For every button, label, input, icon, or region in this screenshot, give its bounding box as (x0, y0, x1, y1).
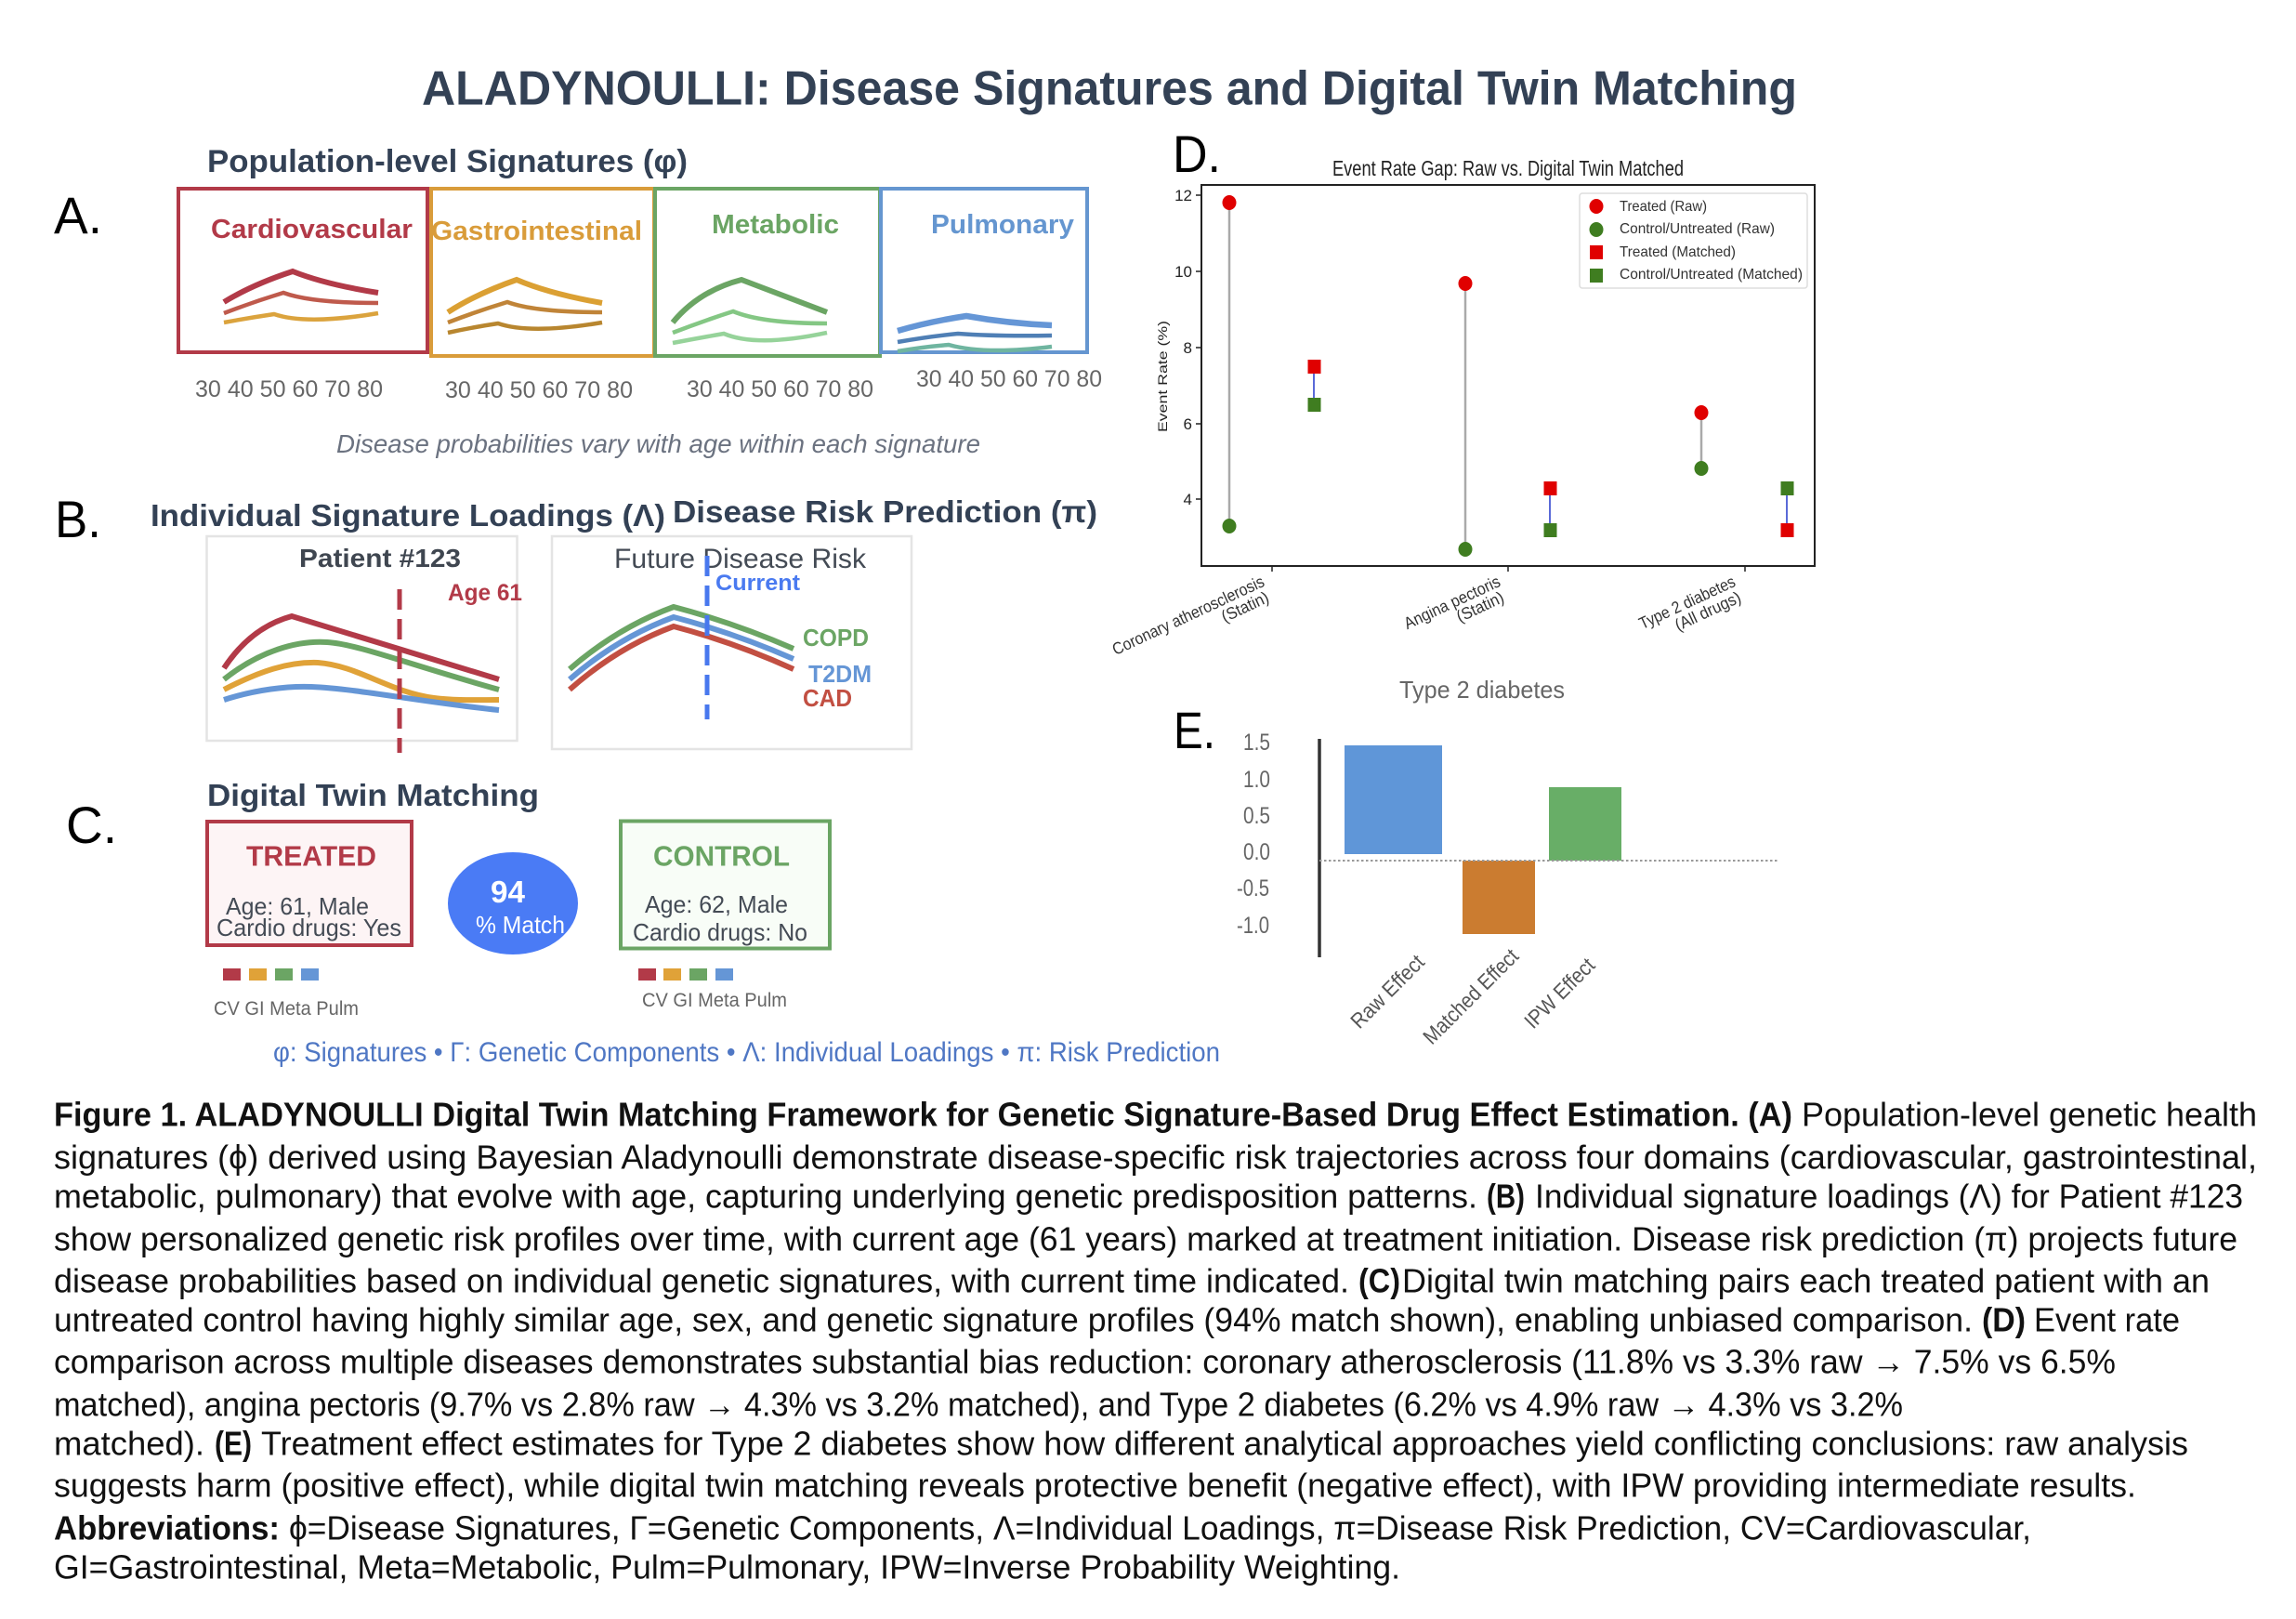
chart: patient loadings (206, 536, 522, 753)
heading: population-level signatures: Population-level Signatures (φ) (207, 144, 688, 179)
caption line 12: GI=Gastrointestinal, Meta=Metabolic, Pulm=Pulmonary, IPW=Inverse Probability Weighting. (54, 1548, 1400, 1586)
legend (1580, 193, 1807, 288)
y axis: 6 (1184, 415, 1192, 433)
card: gastrointestinal: 30 40 50 60 70 80 (445, 377, 633, 403)
caption line 5 (54, 1262, 2210, 1299)
card: cardiovascular: Cardiovascular (211, 215, 413, 244)
swatches: control signature profile: CV GI Meta Pulm (642, 990, 787, 1011)
chart: patient loadings: Patient #123 (299, 544, 461, 573)
caption line 6: Event rate (2034, 1301, 2180, 1338)
x axis labels: Angina pectoris (1401, 572, 1503, 633)
title: ALADYNOULLI: Disease Signatures and Digital Twin Matching (422, 61, 1797, 115)
caption line 3: Individual signature loadings (Λ) for Patient #123 (1535, 1177, 2243, 1216)
y axis: 4 (1184, 491, 1192, 508)
card: treated: Cardio drugs: Yes (216, 914, 401, 941)
caption line 4: show personalized genetic risk profiles over time, with current age (61 years) marked at treatment initiation. Disease risk prediction (π) projects future (54, 1219, 2237, 1258)
panel letter B: B. (55, 490, 101, 548)
card: gastrointestinal: Gastrointestinal (431, 217, 642, 246)
chart: future disease risk: CAD (803, 684, 852, 712)
caption line 5: (C) (1358, 1262, 1400, 1299)
heading: digital twin matching: Digital Twin Matching (207, 778, 539, 812)
card: metabolic: 30 40 50 60 70 80 (687, 376, 873, 402)
y axis: -1.0 (1237, 913, 1269, 939)
y axis: 1.5 (1243, 730, 1270, 756)
y axis: 1.0 (1243, 767, 1270, 793)
note: disease probabilities: Disease probabilities vary with age within each signature (336, 429, 980, 458)
bar labels: IPW Effect (1519, 953, 1600, 1033)
caption line 1: Population-level genetic health (1802, 1095, 2257, 1134)
caption line 2: signatures (ϕ) derived using Bayesian Aladynoulli demonstrate disease-specific risk trajectories across four domains (cardiovascular, gastrointestinal, (54, 1138, 2257, 1177)
card: control: CONTROL (653, 840, 790, 872)
figure caption (54, 1095, 2257, 1586)
card: treated: TREATED (246, 840, 376, 872)
card: metabolic: Metabolic (712, 210, 839, 240)
card: pulmonary (881, 189, 1102, 392)
type 2 diabetes points (1695, 405, 1793, 537)
caption line 6: untreated control having highly similar age, sex, and genetic signature profiles (94% match shown), enabling unbiased comparison. (54, 1301, 1973, 1338)
swatches: control signature profile (638, 968, 787, 1011)
panel B: loadings and risk prediction (55, 490, 1097, 753)
chart: patient loadings: Age 61 (448, 580, 522, 606)
symbol legend: φ: Signatures • Γ: Genetic Components • Λ: Individual Loadings • π: Risk Prediction (273, 1037, 1220, 1068)
chart: future disease risk: T2DM (808, 660, 872, 688)
card: treated: Age: 61, Male (226, 892, 369, 920)
y axis: Event Rate (%) (1155, 321, 1170, 432)
card: control: Cardio drugs: No (633, 918, 807, 946)
caption line 10: suggests harm (positive effect), while digital twin matching reveals protective benefit (negative effect), with IPW providing intermediate results. (54, 1467, 2136, 1504)
plot frame (1201, 185, 1815, 566)
y axis (1155, 187, 1201, 508)
legend: Treated (Matched) (1620, 244, 1736, 260)
legend: Control/Untreated (Raw) (1620, 221, 1775, 237)
x axis labels: (Statin) (1453, 587, 1507, 625)
panel A: population-level signatures (54, 144, 1102, 458)
panel letter C: C. (66, 796, 117, 854)
bar: matched effect (1463, 861, 1535, 934)
y axis: 0.0 (1243, 839, 1270, 865)
card: pulmonary: 30 40 50 60 70 80 (916, 366, 1102, 392)
zero line (1319, 860, 1779, 862)
badge: 94% match (448, 852, 578, 954)
caption line 9: matched). (54, 1424, 204, 1463)
badge: 94% match: 94 (491, 875, 526, 909)
x axis labels (1109, 566, 1745, 659)
caption line 3: (B) (1487, 1177, 1525, 1216)
bar: raw effect (1345, 745, 1442, 854)
heading: individual signature loadings: Individual Signature Loadings (Λ) (151, 498, 665, 533)
card: cardiovascular: 30 40 50 60 70 80 (195, 376, 383, 402)
legend: Treated (Raw) (1620, 199, 1707, 215)
caption line 8: matched), angina pectoris (9.7% vs 2.8% raw → 4.3% vs 3.2% matched), and Type 2 diabetes (6.2% vs 4.9% raw → 4.3% vs 3.2% (54, 1385, 1903, 1424)
y axis: 10 (1174, 263, 1192, 281)
caption line 5: disease probabilities based on individual genetic signatures, with current time indicated. (54, 1262, 1349, 1299)
card: cardiovascular (178, 189, 427, 402)
legend: Control/Untreated (Matched) (1620, 267, 1803, 283)
bar: IPW effect (1549, 787, 1621, 861)
caption line 1: Figure 1. ALADYNOULLI Digital Twin Matching Framework for Genetic Signature-Based Drug Effect Estimation. (A) (54, 1095, 1792, 1134)
swatches: treated signature profile: CV GI Meta Pulm (214, 998, 359, 1020)
card: control: Age: 62, Male (645, 890, 788, 918)
angina pectoris points (1459, 276, 1557, 557)
card: gastrointestinal (431, 189, 654, 403)
caption line 3 (54, 1177, 2243, 1216)
y axis (1237, 730, 1319, 957)
bar labels: Raw Effect (1345, 949, 1429, 1033)
caption line 5: Digital twin matching pairs each treated patient with an (1402, 1262, 2210, 1299)
panel letter A: A. (54, 186, 102, 244)
y axis: 8 (1184, 339, 1192, 357)
card: metabolic (655, 189, 880, 402)
coronary atherosclerosis points (1223, 195, 1321, 533)
x axis labels: (All drugs) (1672, 587, 1744, 635)
panel letter D: D. (1173, 125, 1221, 183)
y axis: 0.5 (1243, 803, 1270, 829)
chart title: Event Rate Gap: Raw vs. Digital Twin Matched (1332, 156, 1684, 180)
panel D: event rate gap chart (1109, 125, 1815, 659)
bar labels (1345, 943, 1600, 1049)
card: pulmonary: Pulmonary (931, 210, 1074, 240)
caption line 3: metabolic, pulmonary) that evolve with age, capturing underlying genetic predisposition patterns. (54, 1177, 1477, 1216)
x axis labels: (Statin) (1218, 587, 1272, 625)
heading: disease risk prediction: Disease Risk Prediction (π) (673, 494, 1097, 529)
chart: future disease risk (552, 536, 912, 749)
caption line 9: (E) (215, 1424, 252, 1463)
badge: 94% match: % Match (476, 911, 565, 939)
caption line 6: (D) (1982, 1301, 2026, 1338)
caption line 11: ϕ=Disease Signatures, Γ=Genetic Components, Λ=Individual Loadings, π=Disease Risk Prediction, CV=Cardiovascular, (289, 1509, 2031, 1547)
caption line 9: Treatment effect estimates for Type 2 diabetes show how different analytical approaches yield conflicting conclusions: raw analysis (261, 1424, 2188, 1463)
x axis labels: Coronary atherosclerosis (1109, 572, 1267, 659)
chart: future disease risk: COPD (803, 624, 869, 652)
card: treated (207, 822, 412, 945)
bar labels: Matched Effect (1418, 943, 1524, 1049)
swatches: treated signature profile (214, 968, 359, 1020)
x axis labels: Type 2 diabetes (1636, 572, 1738, 633)
panel letter E: E. (1174, 701, 1215, 759)
panel C: digital twin matching (66, 778, 1220, 1068)
y axis: 12 (1174, 187, 1192, 204)
caption line 7: comparison across multiple diseases demonstrates substantial bias reduction: coronary atherosclerosis (11.8% vs 3.3% raw → 7.5% vs 6.5% (54, 1342, 2116, 1381)
chart: future disease risk: Current (715, 571, 800, 596)
chart title: Type 2 diabetes (1399, 676, 1565, 704)
y axis: -0.5 (1237, 875, 1269, 902)
panel E: treatment effect bars (1174, 676, 1779, 1049)
card: control (621, 822, 830, 948)
caption line 11: Abbreviations: (54, 1509, 280, 1547)
chart: future disease risk: Future Disease Risk (614, 544, 867, 574)
